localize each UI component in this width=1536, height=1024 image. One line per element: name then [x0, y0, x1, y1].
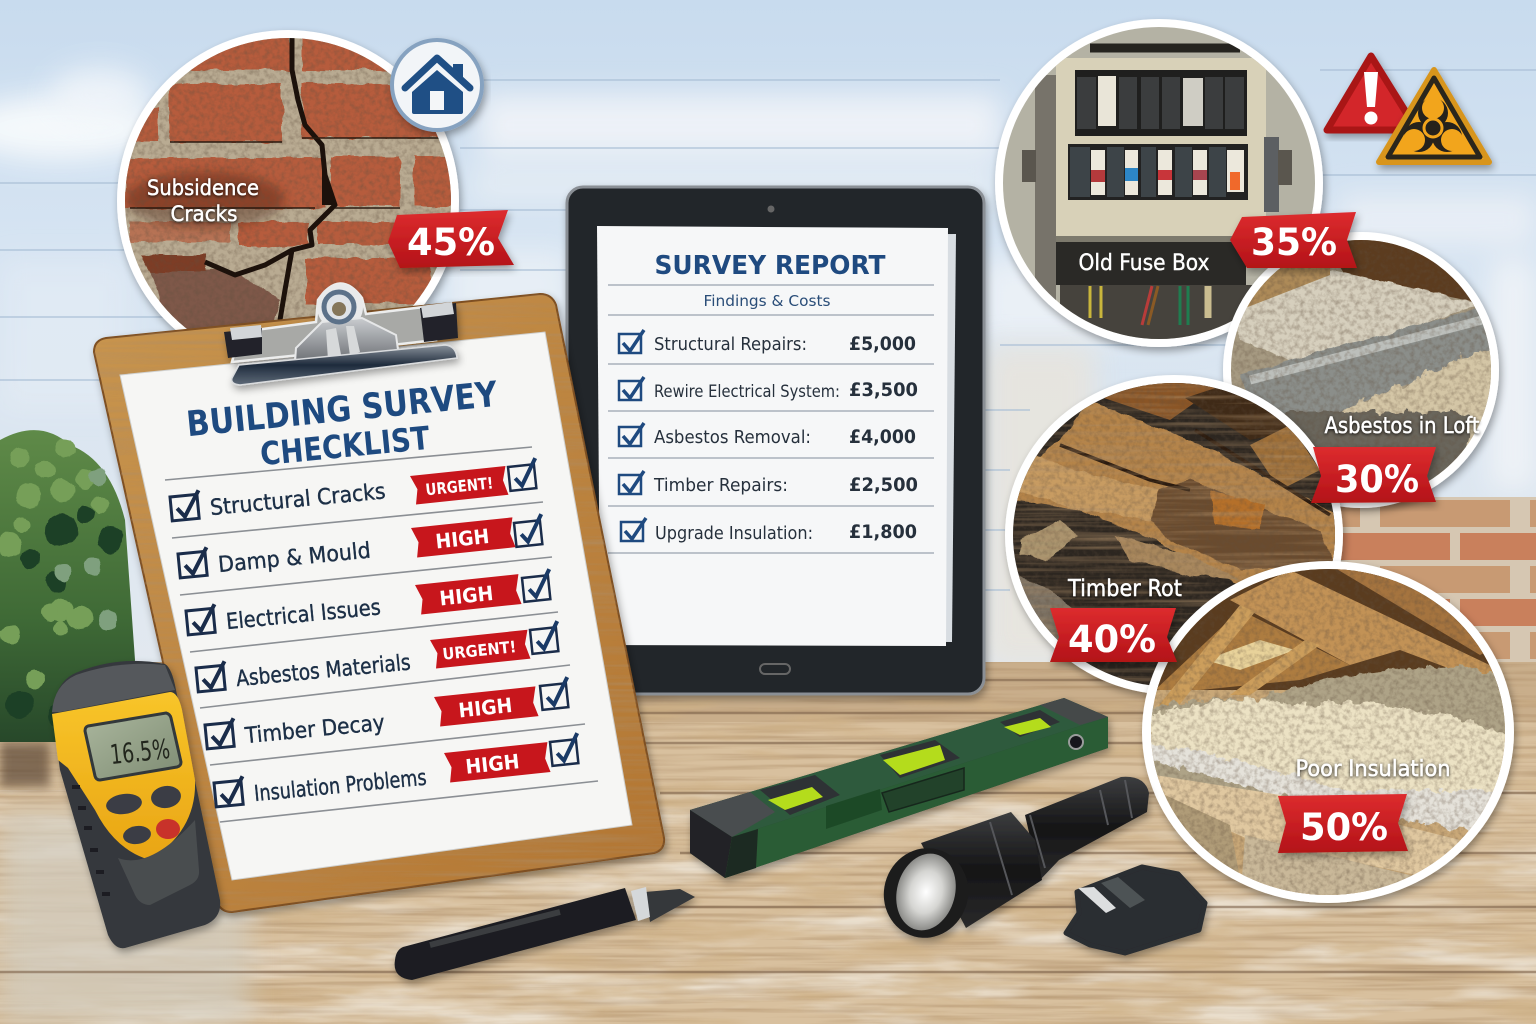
report row: timber repairs: Timber Repairs: — [653, 475, 788, 496]
priority tag: high: HIGH — [434, 524, 491, 553]
badge: 30% — [1311, 447, 1436, 503]
report subtitle: Findings & Costs — [704, 292, 830, 310]
checklist row: damp and mould: Damp & Mould — [217, 539, 372, 578]
old fuse box label: Old Fuse Box — [1078, 251, 1210, 276]
background: hedge — [0, 430, 135, 742]
checklist row: timber decay: Timber Decay — [243, 711, 386, 749]
checklist row: insulation problems — [214, 759, 428, 811]
report row: timber repairs — [619, 471, 918, 496]
checklist row: timber decay — [205, 704, 386, 753]
report row: structural repairs: Structural Repairs: — [654, 334, 807, 355]
badge: 35% — [1230, 212, 1357, 268]
tick — [529, 621, 560, 654]
report row: upgrade insulation — [621, 518, 917, 544]
checklist row: structural cracks: Structural Cracks — [209, 479, 387, 521]
checklist row: insulation problems: Insulation Problems — [253, 766, 428, 807]
background: sky and siding wall — [0, 0, 1536, 700]
clipboard — [90, 283, 670, 915]
pen — [395, 887, 695, 980]
priority tag: high — [444, 742, 551, 783]
subsidence label: Cracks — [170, 202, 238, 226]
meter display: 16.5% — [109, 734, 172, 771]
badge: 50%: 50% — [1300, 806, 1388, 849]
checklist row: structural cracks — [170, 472, 387, 525]
crack line — [205, 38, 335, 320]
priority tag: high — [411, 517, 516, 558]
background: brick wall — [1330, 497, 1536, 675]
background: wooden desk — [0, 662, 1536, 1024]
photo circle: asbestos in loft — [1223, 232, 1510, 510]
priority tag: urgent — [410, 466, 509, 505]
report row: structural repairs — [619, 330, 916, 355]
badge: 35%: 35% — [1251, 221, 1337, 264]
badge: 40%: 40% — [1068, 618, 1156, 661]
badge: 30%: 30% — [1335, 458, 1419, 501]
priority tag: urgent: URGENT! — [442, 637, 517, 664]
priority tag: urgent: URGENT! — [425, 473, 494, 499]
poor insulation label: Poor Insulation — [1296, 757, 1450, 782]
checklist title: CHECKLIST — [258, 419, 432, 473]
checklist title — [185, 375, 500, 473]
photo circle: poor insulation — [1140, 555, 1520, 905]
checklist row: electrical issues: Electrical Issues — [225, 595, 382, 635]
badge: 45% — [388, 210, 514, 268]
asbestos label: Asbestos in Loft — [1324, 414, 1480, 439]
tick — [539, 677, 570, 710]
checklist paper — [120, 332, 632, 880]
spirit level — [690, 698, 1108, 878]
flashlight — [874, 777, 1149, 947]
tick — [549, 733, 580, 766]
timber rot label: Timber Rot — [1067, 576, 1182, 602]
badge: 45%: 45% — [407, 221, 495, 264]
tick — [513, 514, 544, 547]
subsidence label: Subsidence — [147, 176, 259, 200]
priority tag: high: HIGH — [464, 749, 521, 779]
photo circle: subsidence cracks — [114, 29, 466, 330]
report row: asbestos removal: Asbestos Removal: — [654, 427, 811, 448]
checklist row: electrical issues — [186, 588, 382, 639]
report row: rewire — [619, 377, 918, 402]
report title: SURVEY REPORT — [654, 251, 886, 281]
subsidence label — [147, 176, 259, 226]
checklist title: BUILDING SURVEY — [185, 375, 500, 445]
report row: upgrade insulation: £1,800 — [849, 521, 917, 543]
checklist row: damp and mould — [178, 532, 372, 582]
checklist row: asbestos materials: Asbestos Materials — [235, 650, 412, 692]
badge: 50% — [1278, 794, 1408, 853]
priority tag: urgent — [430, 630, 530, 669]
badge: 40% — [1050, 608, 1177, 662]
tick — [521, 569, 552, 602]
icon: warning triangle — [1327, 56, 1417, 130]
photo circle: old fuse box — [990, 19, 1330, 350]
moisture meter — [52, 661, 220, 948]
meter display — [85, 713, 181, 780]
priority tag: high: HIGH — [438, 581, 495, 610]
tablet — [567, 187, 984, 694]
report row: upgrade insulation: Upgrade Insulation: — [655, 523, 813, 544]
report row: rewire: Rewire Electrical System: — [654, 382, 840, 402]
icon: biohazard triangle — [1379, 70, 1489, 162]
report paper — [597, 226, 956, 646]
report row: asbestos removal: £4,000 — [849, 426, 916, 448]
report row: structural repairs: £5,000 — [849, 333, 916, 355]
report row: rewire: £3,500 — [849, 379, 918, 401]
key fob — [1066, 867, 1205, 953]
photo circle: timber rot — [1000, 370, 1350, 700]
checklist row: asbestos materials — [196, 644, 412, 696]
report row: asbestos removal — [619, 423, 916, 448]
priority tag: high — [434, 686, 539, 727]
priority tag: high — [415, 574, 522, 615]
priority tag: high: HIGH — [457, 693, 514, 722]
icon: house badge — [392, 40, 482, 130]
tick — [507, 458, 538, 491]
report row: timber repairs: £2,500 — [849, 474, 918, 496]
clipboard clip — [224, 283, 458, 385]
